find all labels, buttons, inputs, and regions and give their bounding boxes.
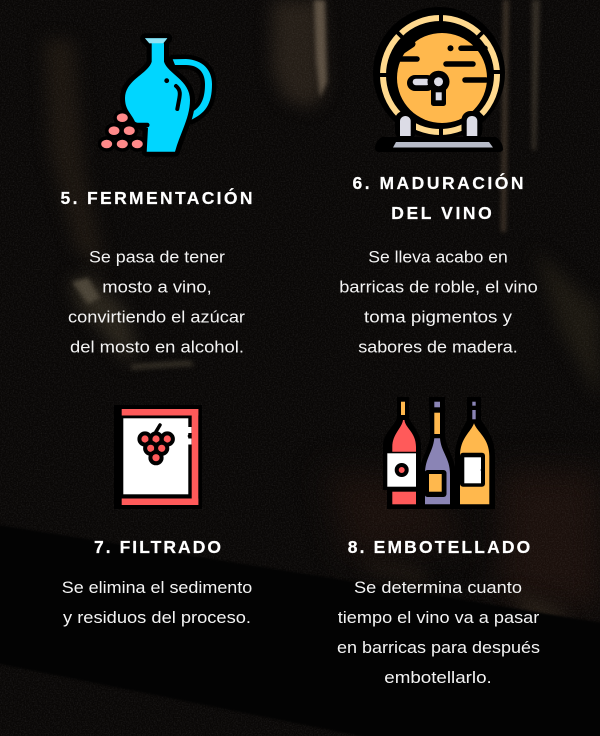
step 7 description bbox=[62, 578, 252, 627]
step 6 description: barricas de roble, el vino bbox=[339, 278, 538, 296]
step 5 description: del mosto en alcohol. bbox=[70, 338, 244, 356]
step 6 description: toma pigmentos y bbox=[364, 308, 513, 326]
step 8 heading: 8. EMBOTELLADO bbox=[348, 537, 530, 557]
step 6 description: Se lleva acabo en bbox=[368, 248, 508, 266]
step 5 description bbox=[68, 248, 245, 356]
step 5 description: Se pasa de tener bbox=[89, 248, 225, 266]
step 8 description: embotellarlo. bbox=[384, 668, 492, 687]
step 6 heading bbox=[352, 172, 524, 223]
icon: wine jug and grapes bbox=[101, 38, 212, 152]
step 6 heading: 6. MADURACIÓN bbox=[352, 172, 524, 193]
icon: oak barrel bbox=[373, 7, 505, 152]
step 8 description: en barricas para después bbox=[337, 638, 540, 657]
step 5 heading: 5. FERMENTACIÓN bbox=[60, 187, 252, 208]
icon: wine filter bbox=[114, 405, 202, 509]
step 8 description bbox=[337, 578, 540, 687]
step 5 description: mosto a vino, bbox=[102, 278, 212, 296]
step 6 heading: DEL VINO bbox=[391, 203, 492, 223]
step 8 description: Se determina cuanto bbox=[354, 578, 522, 597]
step 6 description bbox=[339, 248, 538, 356]
step 7 description: y residuos del proceso. bbox=[63, 608, 251, 627]
step 7 description: Se elimina el sedimento bbox=[62, 578, 252, 597]
step 5 description: convirtiendo el azúcar bbox=[68, 308, 245, 326]
step 7 heading: 7. FILTRADO bbox=[94, 537, 221, 557]
icon: three wine bottles bbox=[383, 397, 495, 509]
step 6 description: sabores de madera. bbox=[358, 338, 518, 356]
step 8 description: tiempo el vino va a pasar bbox=[338, 608, 540, 627]
